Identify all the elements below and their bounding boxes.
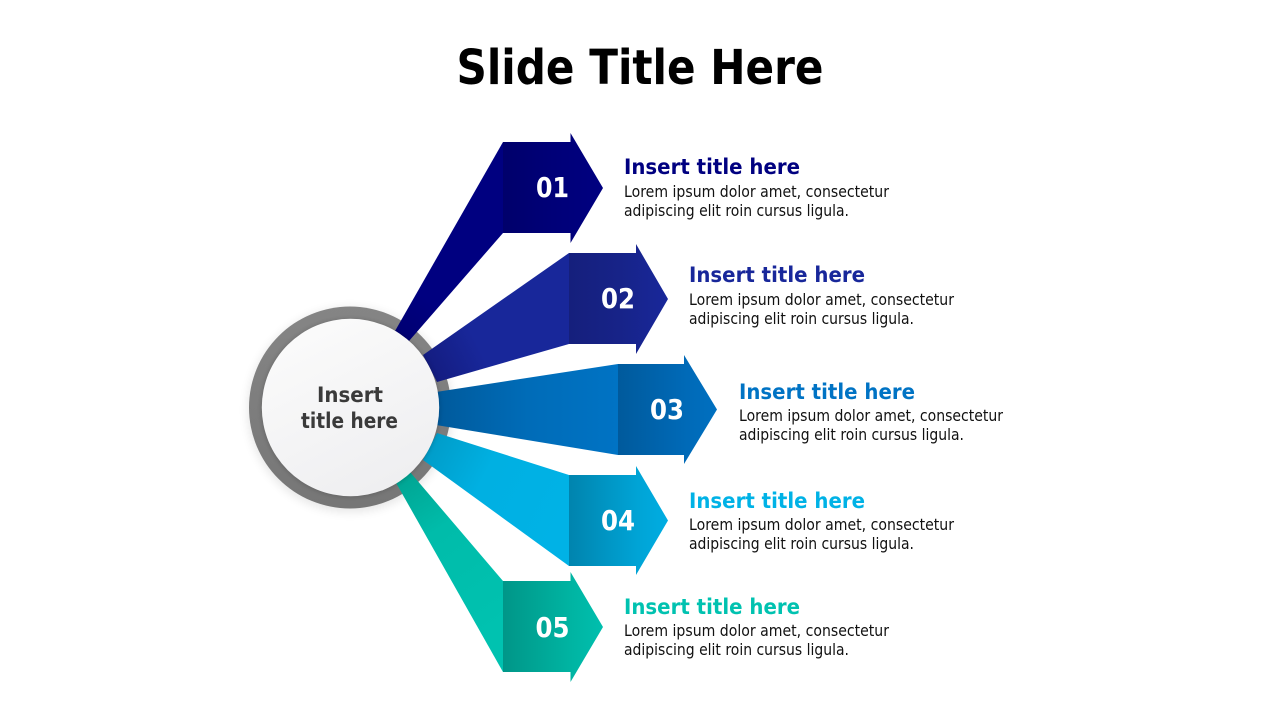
arrow 02: [423, 244, 668, 382]
text block 03: [739, 380, 1003, 444]
text block 04: Lorem ipsum dolor amet, consectetur: [689, 515, 954, 534]
arrow 03: 03: [650, 394, 684, 426]
arrow 04: [423, 433, 668, 575]
center ring: [248, 306, 452, 512]
text block 02: Lorem ipsum dolor amet, consectetur: [689, 290, 954, 309]
arrow 04: 04: [601, 505, 635, 537]
arrow 01: [395, 133, 603, 341]
arrow 05: [395, 472, 603, 682]
text block 01: adipiscing elit roin cursus ligula.: [624, 201, 849, 220]
text block 04: adipiscing elit roin cursus ligula.: [689, 534, 914, 553]
arrow 03: [436, 355, 717, 464]
arrow 05: 05: [536, 612, 570, 644]
text block 05: Lorem ipsum dolor amet, consectetur: [624, 621, 889, 640]
text block 01: [624, 155, 889, 220]
text block 04: [689, 489, 954, 553]
arrow 01: 01: [536, 172, 569, 204]
text block 02: [689, 263, 954, 328]
center circle: title here: [301, 409, 398, 434]
text block 05: [624, 595, 889, 659]
arrow 02: 02: [601, 283, 635, 315]
text block 02: adipiscing elit roin cursus ligula.: [689, 309, 914, 328]
text block 02: Insert title here: [689, 263, 865, 288]
text block 01: Lorem ipsum dolor amet, consectetur: [624, 182, 889, 201]
text block 05: Insert title here: [624, 595, 800, 620]
text block 03: adipiscing elit roin cursus ligula.: [739, 425, 964, 444]
text block 03: Lorem ipsum dolor amet, consectetur: [739, 406, 1003, 425]
center circle: Insert: [317, 383, 383, 408]
text block 03: Insert title here: [739, 380, 915, 405]
center circle: [261, 318, 440, 498]
text block 01: Insert title here: [624, 155, 800, 180]
text block 04: Insert title here: [689, 489, 865, 514]
text block 05: adipiscing elit roin cursus ligula.: [624, 640, 849, 659]
title: Slide Title Here: [456, 40, 824, 96]
